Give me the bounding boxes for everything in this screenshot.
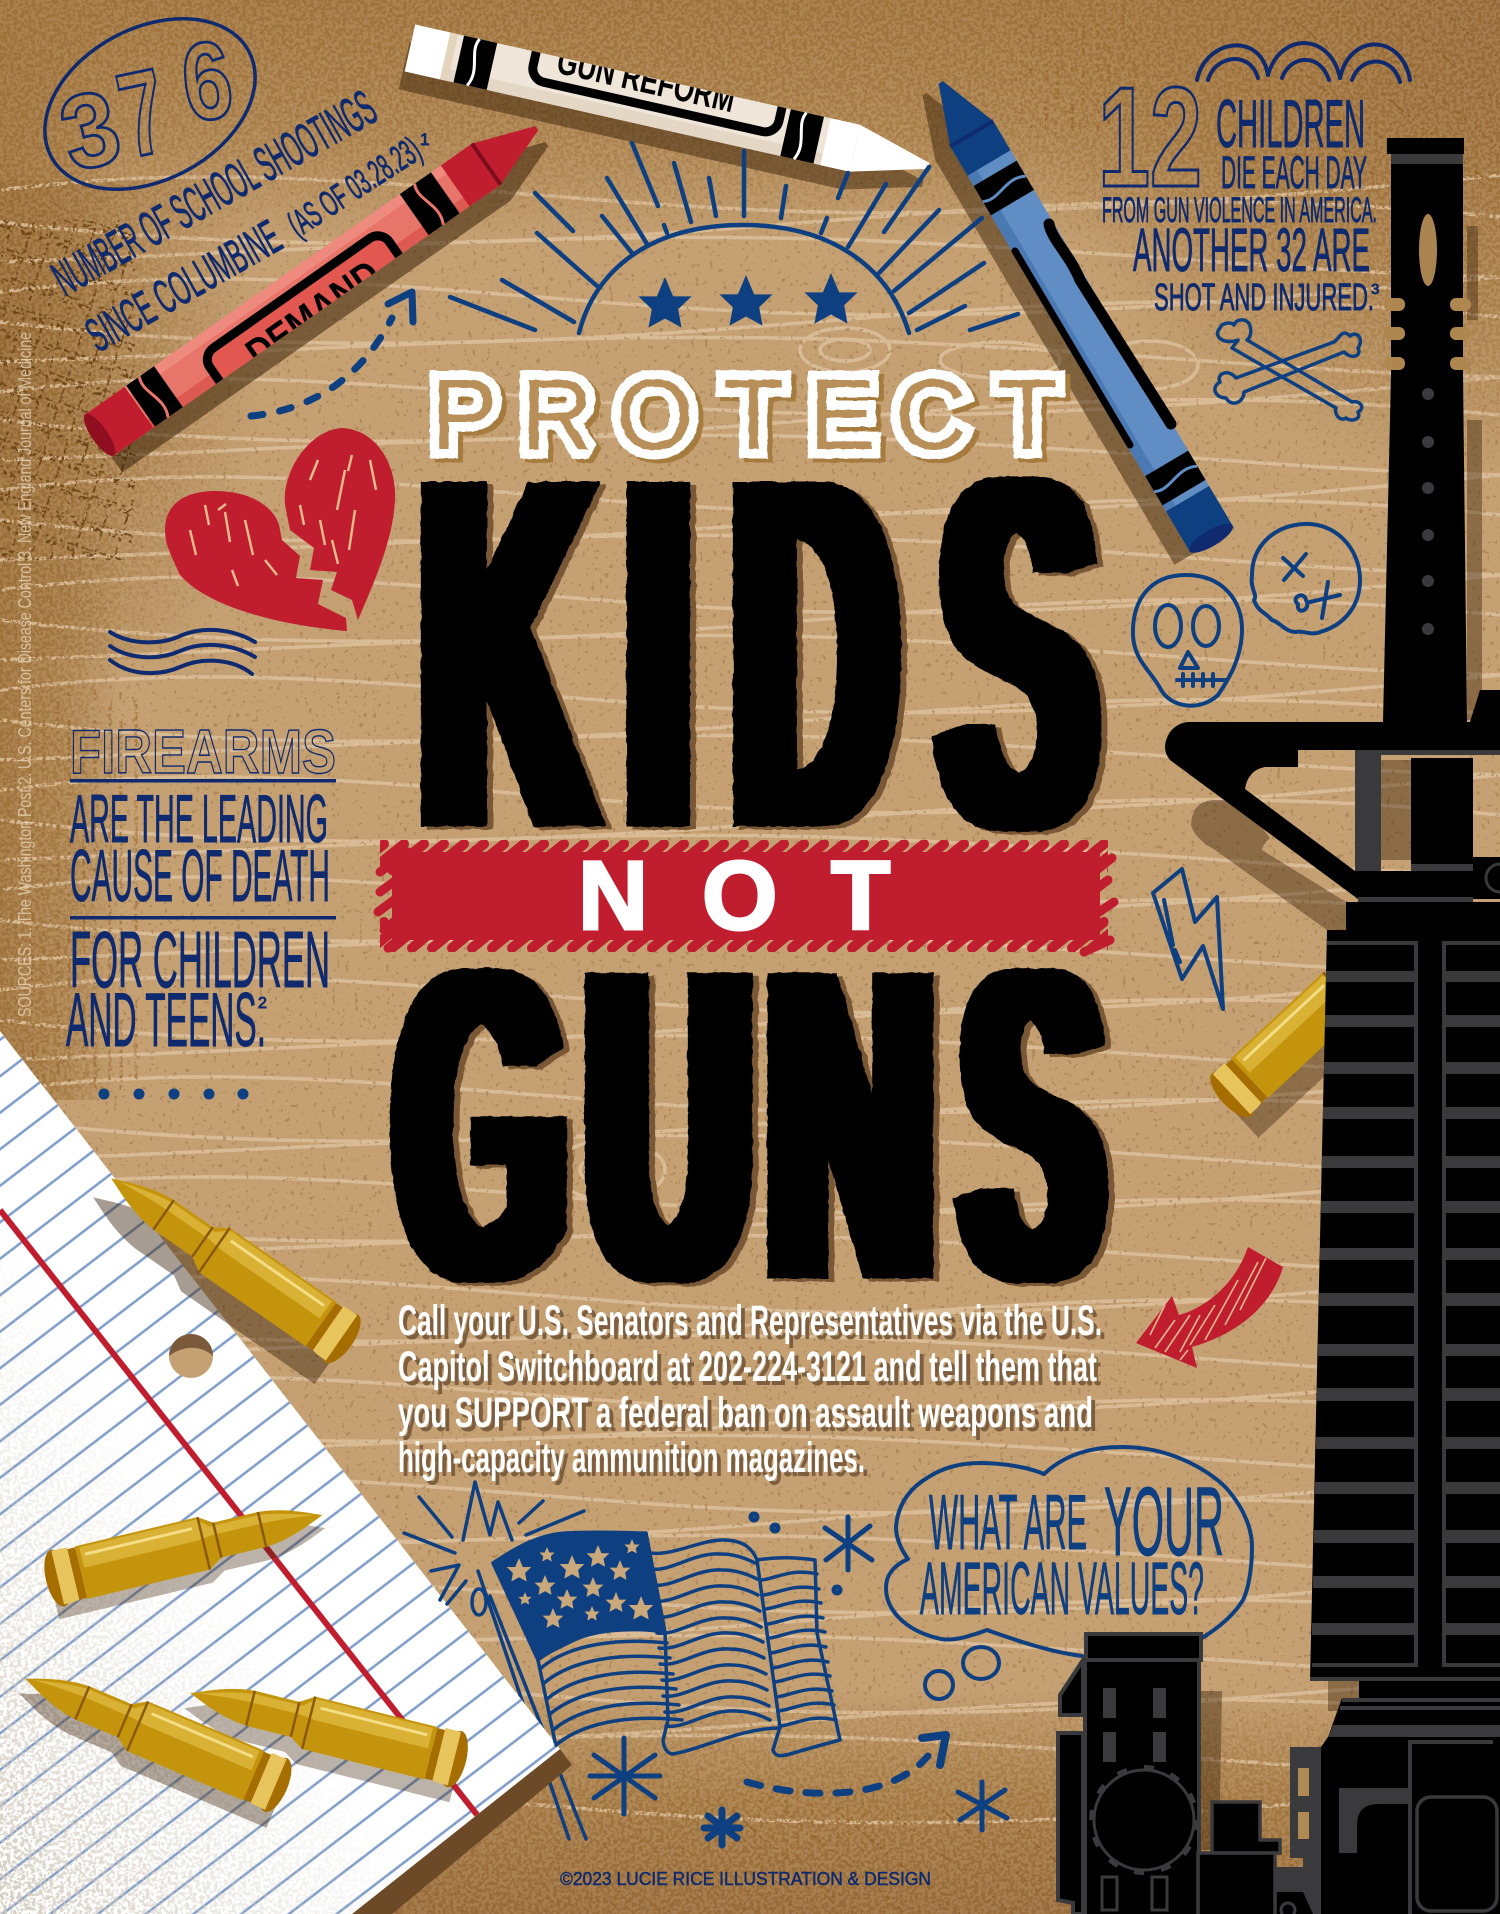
title: kids: K bbox=[421, 374, 592, 932]
arches doodle bbox=[1197, 43, 1410, 82]
call to action text: high-capacity ammunition magazines. bbox=[398, 1434, 865, 1482]
wave doodle bbox=[110, 630, 255, 674]
dotted row bbox=[98, 1088, 248, 1100]
12 children stat: 12 bbox=[1098, 58, 1202, 217]
white crayon: gun reform: GUN REFORM bbox=[553, 40, 739, 121]
barrel bbox=[1383, 138, 1500, 722]
12 children stat: 3 bbox=[1371, 281, 1379, 298]
american flag doodle bbox=[404, 1482, 840, 1756]
title: kids: D bbox=[734, 375, 895, 933]
sun with stars and rays bbox=[450, 143, 1018, 333]
bullet on paper edge bbox=[78, 1155, 368, 1384]
title: guns: S bbox=[963, 878, 1101, 1373]
school shootings text: SINCE COLUMBINE bbox=[77, 211, 291, 363]
lightning doodle bbox=[1153, 869, 1223, 1009]
12 children stat bbox=[1098, 58, 1379, 319]
title: kids: I bbox=[628, 374, 689, 932]
title: guns bbox=[397, 877, 1101, 1373]
blue crayon bbox=[904, 69, 1237, 565]
bullet middle bbox=[39, 1487, 332, 1619]
red crayon: demand: DEMAND bbox=[237, 251, 390, 377]
poster: ARE THE LEADING bbox=[70, 781, 328, 857]
rifle silhouette bbox=[1058, 138, 1500, 1914]
title: guns: N bbox=[768, 877, 933, 1372]
firearms stat: AND TEENS. bbox=[66, 978, 266, 1063]
front sight triangle bbox=[1165, 722, 1500, 902]
title: kids: S bbox=[941, 375, 1094, 933]
call to action text bbox=[398, 1297, 1102, 1482]
asterisk doodles bbox=[590, 1514, 1007, 1845]
title: guns: G bbox=[397, 877, 564, 1372]
lower receiver bbox=[1260, 1681, 1500, 1914]
copyright: ©2023 LUCIE RICE ILLUSTRATION & DESIGN bbox=[560, 1869, 931, 1889]
handguard bbox=[1310, 902, 1500, 1681]
paper shadow bbox=[352, 1749, 572, 1914]
red scribble band bbox=[378, 840, 1114, 952]
poster: CAUSE OF DEATH bbox=[70, 836, 330, 917]
notebook paper bbox=[0, 1030, 560, 1914]
firearms stat bbox=[66, 718, 336, 1063]
school shootings text: (AS OF 03.28.23) bbox=[280, 129, 428, 245]
title: kids bbox=[421, 374, 1094, 933]
firearms stat: 2 bbox=[258, 995, 267, 1012]
bullet behind gun bbox=[1203, 888, 1463, 1138]
oval 376 stat bbox=[15, 0, 285, 224]
firearms stat: FIREARMS bbox=[70, 718, 336, 787]
title: protect: PROTECT bbox=[431, 359, 1058, 471]
flag pole bbox=[478, 1571, 586, 1839]
speech bubble: WHAT ARE bbox=[929, 1478, 1087, 1566]
oval 376 stat: 6 bbox=[174, 18, 240, 146]
call to action text: Capitol Switchboard at 202-224-3121 and tell them that bbox=[398, 1343, 1097, 1391]
rifle shadows bbox=[1191, 226, 1482, 1850]
bullet lower left bbox=[9, 1652, 298, 1828]
broken heart bbox=[165, 428, 395, 631]
vertical sources note: SOURCES: 1. The Washington Post 2. U.S. Centers for Disease Control 3. New England Journal of Medicine bbox=[15, 332, 35, 1017]
top-left dashed arrow bbox=[251, 292, 413, 416]
poster: FOR CHILDREN bbox=[70, 915, 330, 1004]
speech bubble: YOUR bbox=[1104, 1467, 1224, 1576]
crossbones doodle bbox=[1215, 320, 1362, 420]
school shootings text: 1 bbox=[420, 130, 429, 149]
magazine block bbox=[1058, 1634, 1280, 1914]
title: guns: U bbox=[587, 877, 750, 1372]
bottom dashed arrow bbox=[747, 1735, 946, 1793]
oval 376 stat: 7 bbox=[107, 43, 178, 183]
bullet lower right bbox=[178, 1665, 473, 1802]
oval 376 stat: 3 bbox=[49, 66, 131, 194]
speech bubble bbox=[886, 1447, 1252, 1699]
skull doodle tilted bbox=[1252, 524, 1360, 633]
red scribble arrow bbox=[1136, 1247, 1283, 1368]
red crayon: demand bbox=[84, 126, 548, 472]
skull doodle upright bbox=[1133, 575, 1242, 706]
white crayon: gun reform bbox=[398, 24, 930, 190]
call to action text: you SUPPORT a federal ban on assault weapons and bbox=[398, 1389, 1093, 1437]
title: not: NOT bbox=[578, 841, 890, 950]
